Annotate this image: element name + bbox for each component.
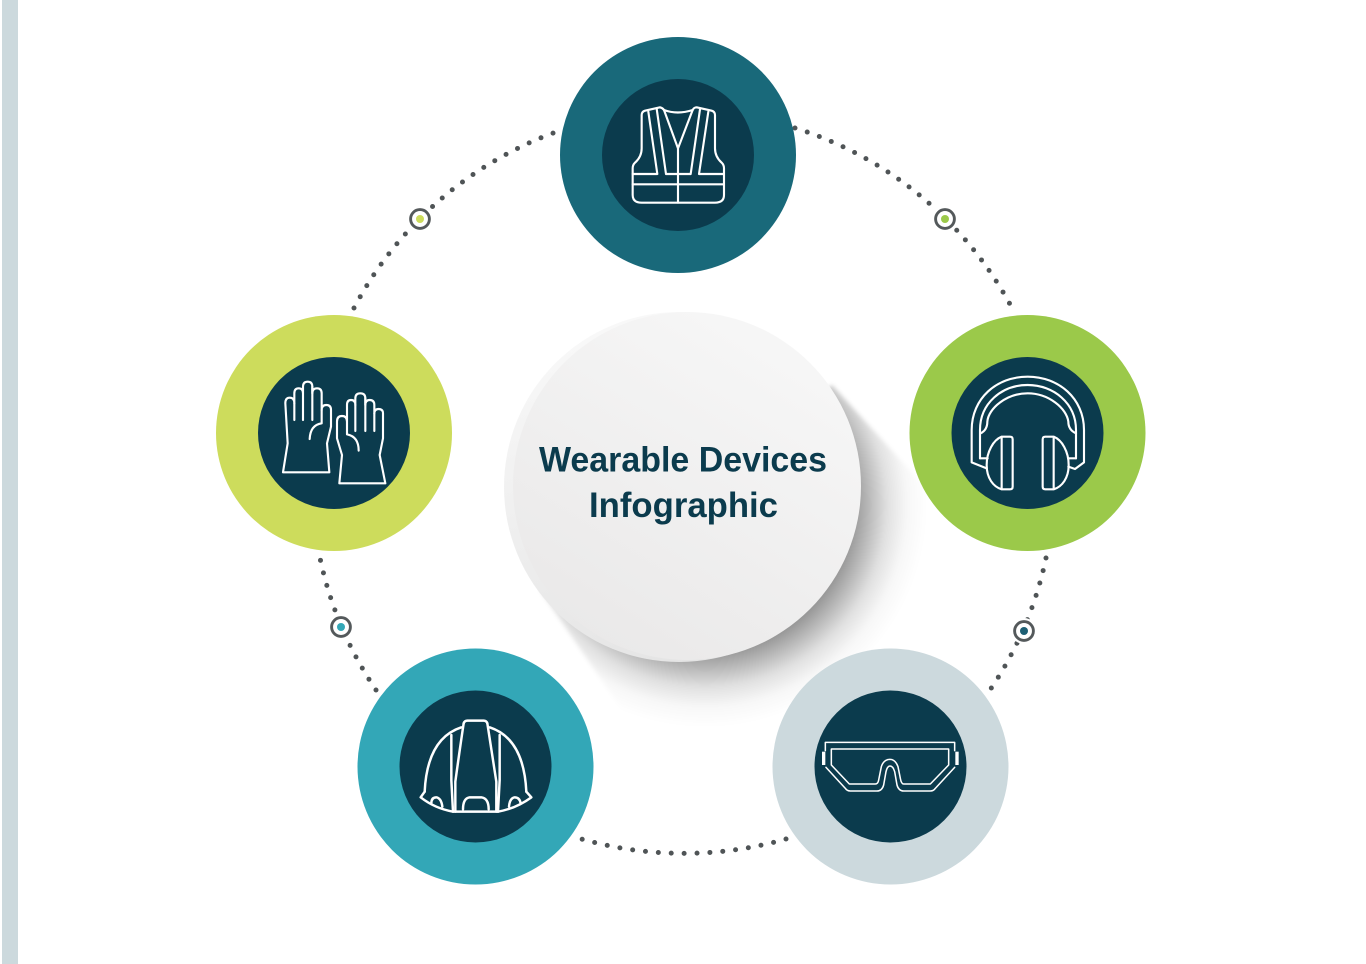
node: gloves [216, 315, 452, 551]
node: hard hat [358, 648, 594, 884]
node: safety vest [560, 37, 796, 273]
title: Wearable Devices [539, 440, 827, 480]
left edge bar [2, 0, 18, 964]
marker: left [328, 614, 354, 640]
central disc shadow [548, 384, 907, 707]
icon: gloves [283, 382, 385, 483]
marker: top left [407, 206, 433, 232]
node: safety goggles [772, 648, 1008, 884]
dotted ring [320, 128, 1046, 853]
icon: ear defenders [972, 377, 1084, 489]
icon: hard hat [421, 721, 531, 812]
marker: top right [932, 206, 958, 232]
node: ear defenders [910, 315, 1146, 551]
icon: safety goggles [822, 742, 959, 791]
title [539, 440, 827, 525]
title: Infographic [589, 486, 778, 525]
central disc [504, 312, 861, 662]
marker: right [1011, 618, 1037, 644]
icon: safety vest [633, 107, 724, 203]
